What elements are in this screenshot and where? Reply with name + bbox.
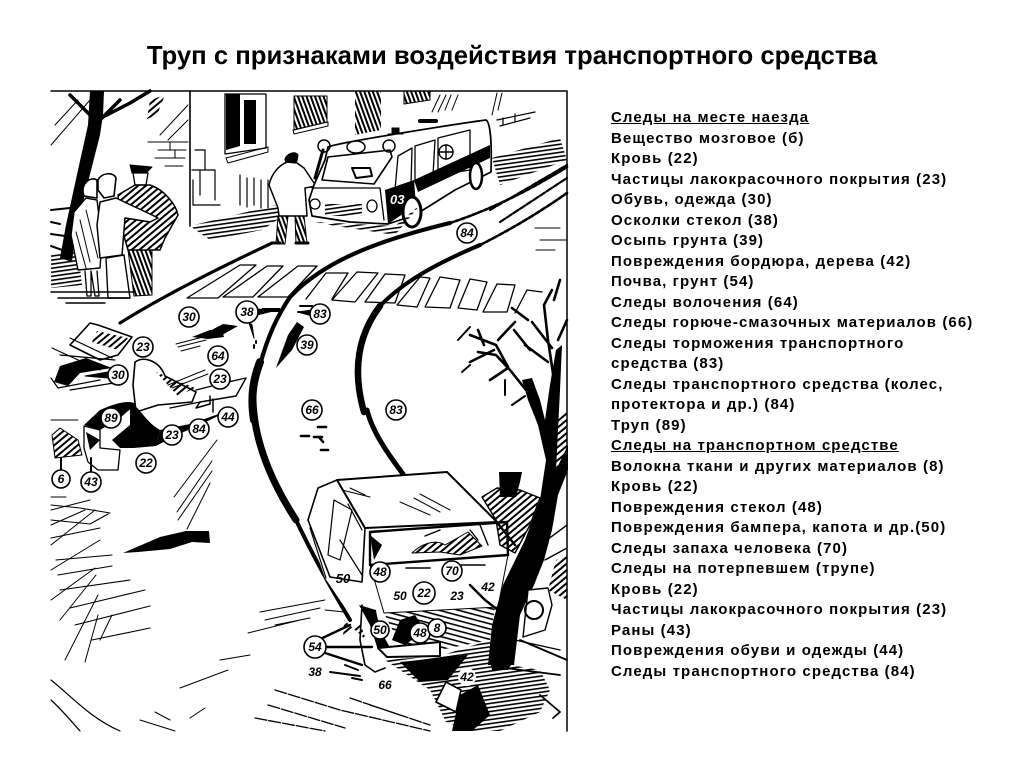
label 83: 83 (313, 307, 327, 321)
tree in front of car (458, 280, 568, 665)
label 66: 66 (305, 403, 319, 417)
label 30 (179, 307, 199, 327)
label 30: 30 (111, 368, 125, 382)
label 8: 8 (434, 621, 441, 635)
skid marks and blood smear (51, 440, 325, 731)
label 43 (81, 458, 101, 492)
legend: list of traces: Следы на месте наезда (611, 109, 809, 126)
label 23: 23 (212, 372, 227, 386)
label 44 (218, 407, 238, 427)
evidence number labels (52, 223, 495, 692)
legend: list of traces: Кровь (22) (611, 150, 699, 167)
ground, shadow and debris under car (255, 640, 567, 731)
damaged car (265, 472, 508, 672)
label 39 (297, 335, 317, 355)
label 84: 84 (460, 226, 474, 240)
label 38: 38 (308, 665, 322, 679)
label 48 (410, 623, 430, 643)
label 83 (386, 400, 406, 420)
ambulance (309, 120, 491, 235)
legend: list of traces: Обувь, одежда (30) (611, 191, 773, 208)
label 42: 42 (480, 580, 495, 594)
label 48 (370, 562, 390, 582)
legend: list of traces: Повреждения стекол (48) (611, 498, 823, 516)
legend: list of traces: Следы торможения транспортного (611, 334, 904, 352)
debris: shoe, glass and clothing on road (51, 323, 224, 390)
label 64 (208, 346, 228, 366)
legend: list of traces: протектора и др.) (84) (611, 396, 795, 413)
label 30: 30 (182, 310, 196, 324)
label 23 (210, 369, 230, 389)
policeman (118, 165, 178, 296)
label 64: 64 (211, 349, 225, 363)
legend: list of traces: Следы транспортного средства (колес, (611, 376, 943, 392)
label 23 (162, 425, 182, 445)
man witness pointing (51, 174, 158, 303)
label 39: 39 (300, 338, 314, 352)
legend: list of traces: Кровь (22) (611, 580, 699, 598)
legend: list of traces: Следы запаха человека (70) (611, 540, 848, 556)
label 66: 66 (378, 678, 392, 692)
label 50: 50 (393, 589, 407, 603)
legend: list of traces: Частицы лакокрасочного покрытия (23) (611, 170, 947, 188)
legend: list of traces: Повреждения бампера, капота и др.(50) (611, 519, 946, 536)
legend: list of traces (611, 109, 973, 680)
legend: list of traces: Осколки стекол (38) (611, 212, 779, 228)
label 89: 89 (104, 411, 118, 425)
label 70: 70 (445, 564, 459, 578)
title: Труп с признаками воздействия транспортного средства (147, 42, 877, 70)
label 8 (428, 619, 446, 637)
label 38: 38 (240, 305, 254, 319)
label 44: 44 (220, 410, 235, 424)
legend: list of traces: Почва, грунт (54) (611, 273, 754, 290)
label 22 (136, 453, 156, 473)
label 22: 22 (416, 586, 431, 600)
label 38 (236, 301, 277, 323)
body of the victim (51, 359, 246, 470)
label 23: 23 (164, 428, 179, 442)
trace marks on road (176, 306, 328, 450)
label 83: 83 (389, 403, 403, 417)
label 54: 54 (308, 640, 322, 654)
building with windows (51, 91, 567, 250)
crosswalk (187, 265, 542, 313)
tree at top left (51, 91, 150, 288)
label 6 (52, 458, 70, 488)
label 48: 48 (412, 626, 427, 640)
legend: list of traces: Кровь (22) (611, 478, 699, 495)
ambulance: 03 (390, 192, 405, 207)
label 54 (304, 636, 326, 658)
label 48: 48 (372, 565, 387, 579)
label 84 (189, 419, 209, 439)
man behind car (482, 472, 540, 553)
legend: list of traces: Осыпь грунта (39) (611, 232, 764, 249)
label 22: 22 (138, 456, 153, 470)
label 83 (298, 304, 330, 324)
label 50: 50 (373, 623, 387, 637)
label 66 (302, 400, 322, 420)
legend: list of traces: Вещество мозговое (б) (611, 130, 805, 146)
legend: list of traces: Частицы лакокрасочного покрытия (23) (611, 601, 947, 618)
legend: list of traces: средства (83) (611, 355, 724, 372)
label 84: 84 (192, 422, 206, 436)
label 42 (458, 668, 476, 686)
legend: list of traces: Повреждения бордюра, дерева (42) (611, 252, 911, 270)
label 89 (101, 408, 121, 428)
label 23 (133, 337, 153, 357)
legend: list of traces: Следы на потерпевшем (трупе) (611, 560, 876, 577)
legend: list of traces: Повреждения обуви и одежды (44) (611, 642, 904, 659)
label 22 (413, 582, 435, 604)
label 43: 43 (83, 475, 98, 489)
label 84 (457, 223, 477, 243)
label 23: 23 (449, 589, 464, 603)
doctor in coat (269, 153, 316, 244)
picture frame (51, 91, 567, 731)
label 42: 42 (459, 670, 474, 684)
label 30 (85, 365, 128, 385)
legend: list of traces: Следы транспортного средства (84) (611, 662, 916, 680)
woman witness (71, 179, 102, 296)
legend: list of traces: Труп (89) (611, 416, 687, 434)
legend: list of traces: Следы волочения (64) (611, 294, 799, 310)
legend: list of traces: Следы на транспортном средстве (611, 437, 899, 454)
label 50: 50 (336, 571, 351, 586)
label 50 (371, 621, 389, 639)
label 6: 6 (58, 472, 65, 486)
legend: list of traces: Раны (43) (611, 622, 692, 638)
legend: list of traces: Следы горюче-смазочных материалов (66) (611, 314, 973, 331)
road edges and tyre tracks (120, 167, 567, 620)
label 70 (442, 561, 462, 581)
label 23: 23 (135, 340, 150, 354)
legend: list of traces: Волокна ткани и других материалов (8) (611, 458, 945, 474)
